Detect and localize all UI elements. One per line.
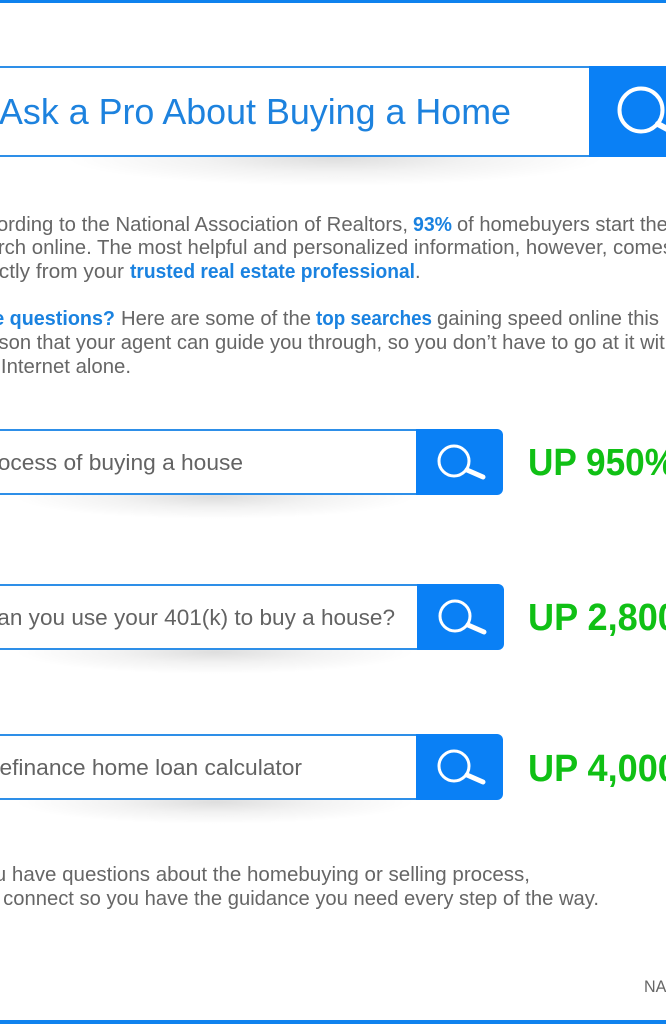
search bar 3 — [0, 734, 503, 824]
title: Ask a Pro About Buying a Home — [0, 91, 511, 132]
bottom border — [0, 1020, 666, 1024]
search bar 2 — [0, 584, 504, 674]
intro paragraph: trusted real estate professional — [130, 261, 415, 283]
closing paragraph — [0, 864, 599, 910]
icon: magnifier 2 — [440, 601, 484, 632]
intro paragraph: . — [415, 261, 421, 283]
intro paragraph — [0, 214, 666, 283]
second paragraph: Here are some of the — [121, 308, 311, 330]
second paragraph: gaining speed online this — [437, 308, 659, 330]
second paragraph — [0, 308, 666, 378]
icon: magnifier 1 — [439, 446, 483, 477]
icon: magnifier 3 — [439, 751, 483, 782]
icon: title magnifier — [620, 88, 666, 136]
second paragraph: top searches — [316, 308, 432, 330]
top border — [0, 0, 666, 3]
intro paragraph: 93% — [413, 214, 452, 236]
search bar 1 — [0, 429, 503, 519]
title search bar — [0, 66, 666, 186]
